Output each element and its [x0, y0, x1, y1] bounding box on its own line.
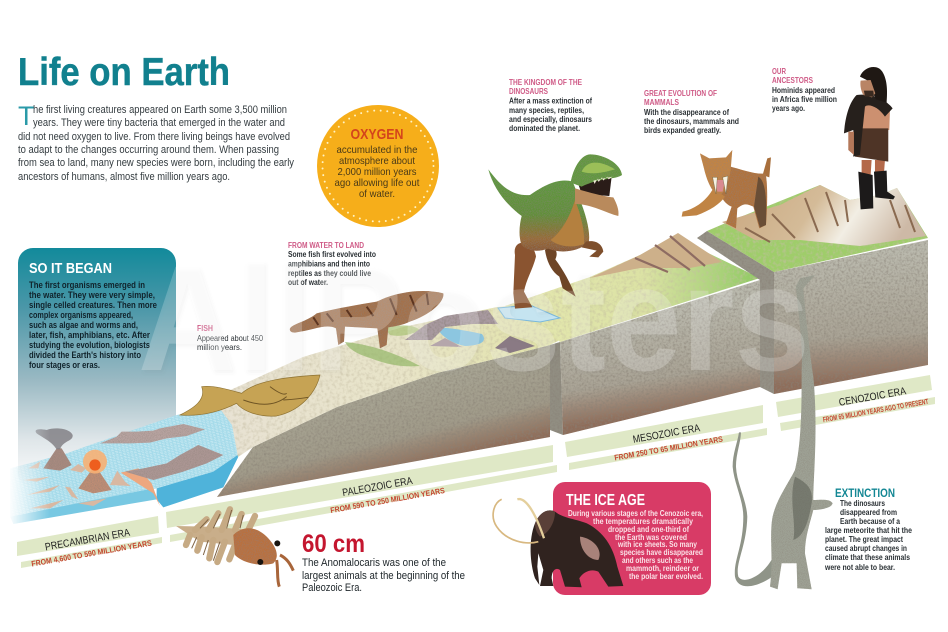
panel: so it began: studying the evolution, biologists: [29, 340, 150, 350]
appendages: [277, 555, 293, 587]
extinction label: [824, 486, 912, 572]
erupting volcano: [78, 450, 112, 493]
panel: so it began: divided the Earth's history into: [29, 350, 142, 360]
our ancestors label: [772, 66, 837, 113]
fish label: [197, 323, 263, 352]
panel: the ice age: the Earth was covered: [615, 533, 687, 542]
head fur: [535, 510, 555, 537]
torso and tail: [488, 169, 589, 251]
60 cm callout: [302, 530, 465, 594]
tusks: [517, 499, 544, 538]
great evolution of mammals label: MAMMALS: [644, 97, 679, 107]
fish label: FISH: [197, 323, 213, 333]
panel: the ice age: the polar bear evolved.: [629, 572, 703, 581]
mouth and fangs: [715, 180, 725, 192]
mauve mountains: [405, 310, 498, 340]
great evolution of mammals label: GREAT EVOLUTION OF: [644, 88, 717, 98]
legs: [862, 160, 885, 175]
arm: [582, 241, 603, 257]
ice lake: [498, 305, 560, 322]
60 cm callout: largest animals at the beginning of the: [302, 570, 465, 582]
body neck and legs: [770, 275, 833, 589]
panel: the ice age: dropped and one-third of: [608, 525, 689, 534]
extinction label: were not able to bear.: [824, 562, 895, 572]
intro text block: ancestors of humans, almost five million years ago.: [18, 171, 230, 183]
panel: so it began: complex organisms appeared,: [29, 310, 133, 320]
boots: [858, 171, 895, 209]
kingdom of the dinosaurs label: DINOSAURS: [509, 86, 548, 96]
fur highlight: [580, 537, 600, 560]
intro text block: he first living creatures appeared on Earth some 3,500 million: [33, 104, 287, 116]
extinction label: climate that these animals: [825, 552, 910, 562]
era label: paleozoic: FROM 590 TO 250 MILLION YEARS: [330, 486, 446, 515]
icon: hominid figure: [844, 67, 895, 209]
from water to land label: reptiles as they could live: [288, 268, 371, 278]
kingdom of the dinosaurs label: [509, 77, 592, 133]
intro text block: did not need oxygen to live. From there living beings have evolved: [18, 131, 290, 143]
great evolution of mammals label: birds expanded greatly.: [644, 125, 721, 135]
our ancestors label: Hominids appeared: [772, 85, 835, 95]
small islands: [23, 462, 131, 508]
icon: fish: [180, 375, 320, 416]
great evolution of mammals label: the dinosaurs, mammals and: [644, 116, 739, 126]
body: [718, 166, 767, 228]
band: cenozoic: [776, 375, 935, 431]
kingdom of the dinosaurs label: many species, reptiles,: [509, 105, 584, 115]
panel: the ice age: with ice sheets. So many: [617, 540, 697, 549]
era label: precambrian: PRECAMBRIAN ERA: [44, 527, 131, 553]
era label: mesozoic: MESOZOIC ERA: [632, 422, 701, 446]
panel: oxygen: OXYGEN: [350, 126, 404, 143]
cenozoic strip and rock face: [697, 231, 928, 394]
mesozoic mountains: [590, 233, 722, 278]
icon: tyrannosaurus: [488, 154, 622, 309]
panel: the ice age: and others such as the: [622, 556, 693, 565]
kingdom of the dinosaurs label: THE KINGDOM OF THE: [509, 77, 582, 87]
panel: so it began: the water. They were very simple,: [29, 290, 155, 300]
panel: so it began: [18, 248, 176, 488]
extinction label: Earth because of a: [840, 516, 900, 526]
panel: so it began: single celled creatures. Then more: [29, 300, 157, 310]
belly shading: [792, 477, 812, 540]
extinction label: The dinosaurs: [840, 498, 885, 508]
panel: the ice age: the temperatures dramatically: [593, 517, 693, 526]
band: mesozoic: [565, 405, 767, 470]
fish label: Appeared about 450: [197, 333, 263, 343]
icon: anomalocaris: [176, 509, 293, 587]
dark flank: [754, 177, 766, 228]
from water to land label: amphibians and then into: [288, 258, 370, 268]
island ridge near: [125, 445, 223, 480]
panel: the ice age: THE ICE AGE: [566, 492, 645, 509]
from water to land label: FROM WATER TO LAND: [288, 240, 364, 250]
torso: [857, 98, 890, 132]
our ancestors label: in Africa five million: [772, 94, 837, 104]
sea surface: [10, 405, 240, 517]
panel: so it began: four stages or eras.: [29, 360, 100, 370]
intro text block: from sea to land, many new species were born, including the early: [18, 157, 294, 169]
front leg: [682, 188, 725, 217]
panel: oxygen: 2,000 million years: [338, 166, 416, 178]
smoking volcano: [36, 428, 73, 471]
era bands: [17, 375, 935, 568]
icon: long-necked dinosaur: [733, 275, 833, 589]
lake: [436, 327, 484, 346]
panel: so it began: later, fish, amphibians, etc. After: [29, 330, 151, 340]
face: [860, 80, 875, 97]
60 cm callout: 60 cm: [302, 530, 365, 558]
head: [700, 150, 732, 195]
panel: oxygen: of water.: [359, 188, 395, 200]
lobes: [176, 526, 253, 545]
vegetation: [345, 342, 420, 366]
cenozoic land surface: [707, 185, 928, 272]
extinction label: caused abrupt changes in: [825, 543, 907, 553]
panel: the ice age: species have disappeared: [620, 548, 703, 557]
extinction label: disappeared from: [840, 507, 897, 517]
upper head: [571, 154, 622, 187]
arm: [848, 132, 854, 155]
panel: so it began: SO IT BEGAN: [29, 261, 112, 277]
intro text block: to adapt to the changes occurring around them. When passing: [18, 144, 279, 156]
our ancestors label: ANCESTORS: [772, 75, 813, 85]
panel: the ice age: During various stages of the Cenozoic era,: [568, 509, 703, 518]
eyes: [274, 540, 280, 546]
our ancestors label: years ago.: [772, 103, 805, 113]
fish label: million years.: [197, 342, 242, 352]
panel: the ice age: [553, 482, 711, 595]
hair: [860, 67, 887, 103]
extinction label: planet. The great impact: [825, 534, 903, 544]
icon: sabertooth: [682, 150, 771, 228]
fur cape: [844, 95, 893, 157]
great evolution of mammals label: With the disappearance of: [644, 107, 729, 117]
era label: mesozoic: [614, 422, 724, 463]
icon: mammoth: [493, 499, 623, 587]
mesozoic land surface: [498, 233, 760, 342]
era label: mesozoic: FROM 250 TO 65 MILLION YEARS: [614, 434, 724, 463]
panel: the ice age: mammoth, reindeer or: [626, 564, 699, 573]
beard: [864, 91, 874, 97]
intro text block: [18, 101, 294, 183]
drop cap: T: [18, 101, 34, 131]
title: Life on Earth: [18, 51, 230, 94]
watermark: AllPosters: [138, 234, 810, 402]
from water to land label: [288, 240, 376, 287]
hind and tail: [763, 157, 771, 177]
panel: oxygen: accumulated in the: [336, 144, 418, 156]
precambrian landscape: [10, 405, 240, 524]
intro text block: years. They were tiny bacteria that emerged in the water and: [33, 117, 285, 129]
body: [233, 528, 277, 565]
band: precambrian: [17, 516, 162, 568]
from water to land label: Some fish first evolved into: [288, 249, 376, 259]
panel: oxygen: [317, 105, 439, 227]
mouth: [578, 177, 612, 196]
mesozoic strip and rock face: [550, 280, 760, 435]
body: [531, 510, 623, 587]
kingdom of the dinosaurs label: dominated the planet.: [509, 123, 580, 133]
icon: amphibian: [290, 291, 443, 348]
chest: [551, 200, 584, 246]
fur skirt: [855, 128, 888, 162]
paleozoic rock face: [217, 345, 550, 497]
era label: paleozoic: PALEOZOIC ERA: [341, 475, 413, 499]
extinction label: EXTINCTION: [835, 486, 895, 500]
far leg: [545, 247, 576, 297]
panel: so it began: The first organisms emerged in: [29, 280, 145, 290]
great evolution of mammals label: [644, 88, 739, 135]
era label: cenozoic: CENOZOIC ERA: [838, 385, 907, 409]
kingdom of the dinosaurs label: and especially, dinosaurs: [509, 114, 592, 124]
extinction label: large meteorite that hit the: [825, 525, 912, 535]
island ridge far: [100, 424, 205, 443]
panel: oxygen: atmosphere about: [339, 155, 415, 167]
era label: precambrian: FROM 4,600 TO 590 MILLION YEARS: [31, 538, 153, 569]
sea block face: [10, 488, 157, 524]
lower jaw: [575, 188, 619, 216]
panel: oxygen: ago allowing life out: [334, 177, 420, 189]
band: paleozoic: [166, 445, 557, 542]
fault: [121, 468, 160, 506]
panel: so it began: such as algae and worms and,: [29, 320, 138, 330]
kingdom of the dinosaurs label: After a mass extinction of: [509, 96, 592, 106]
tail: [733, 432, 780, 586]
near leg: [513, 243, 536, 309]
our ancestors label: OUR: [772, 66, 787, 76]
cenozoic mountains: [722, 185, 926, 246]
from water to land label: out of water.: [288, 277, 328, 287]
paleozoic land surface: [212, 303, 560, 457]
60 cm callout: The Anomalocaris was one of the: [302, 557, 446, 569]
60 cm callout: Paleozoic Era.: [302, 582, 362, 594]
